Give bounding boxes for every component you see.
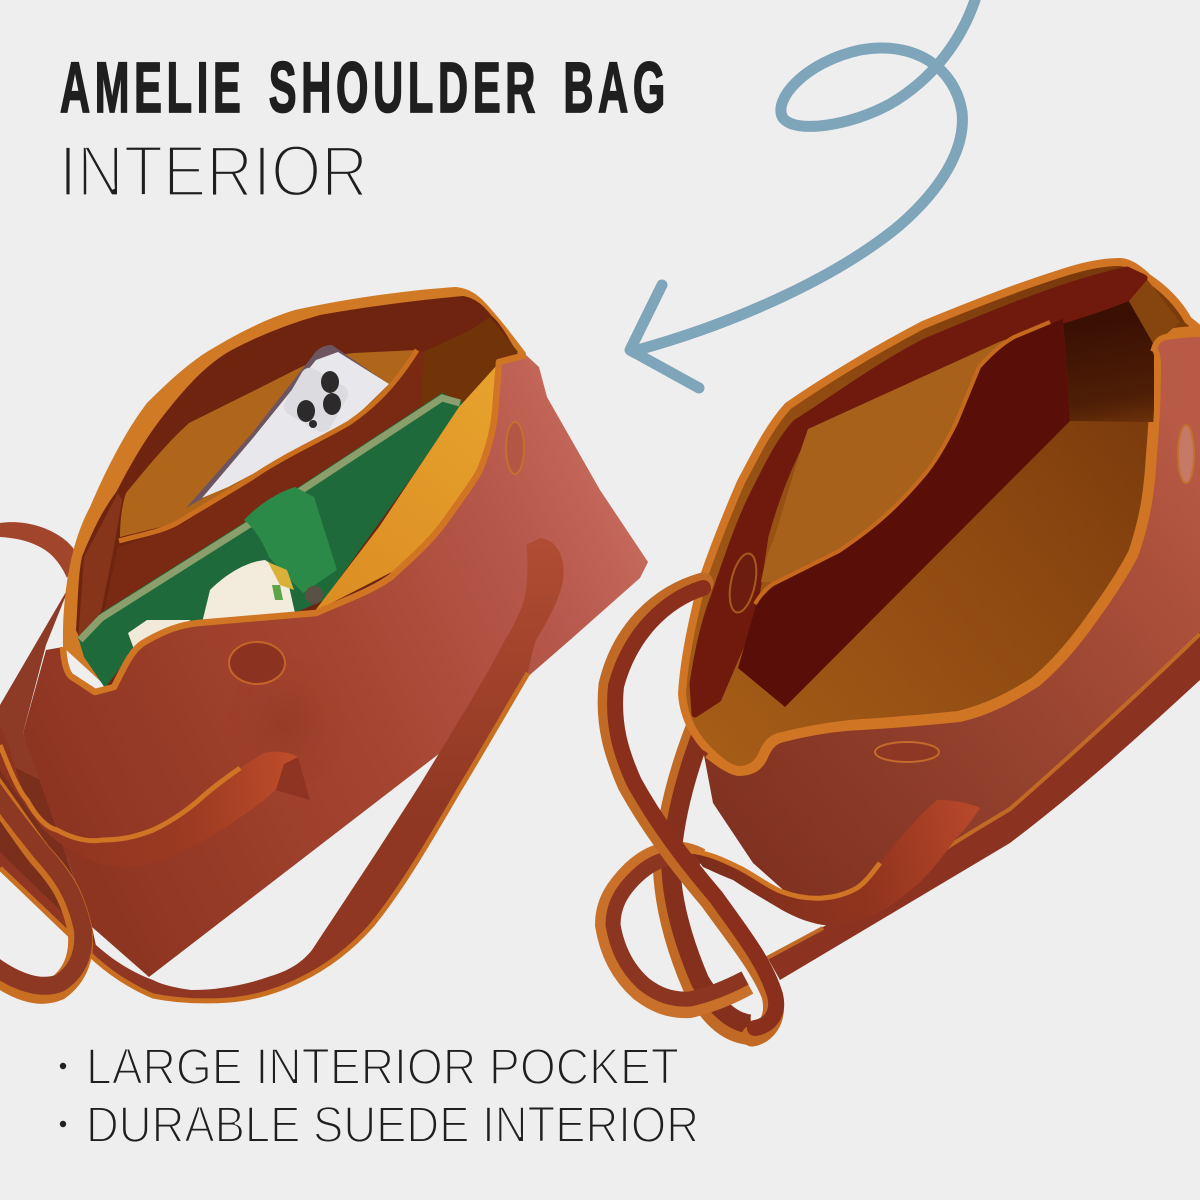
left bag: side loop [0,785,81,991]
bullet 2 [60,1121,66,1127]
arrow [630,0,975,388]
left bag: snap side [506,422,524,474]
left bag: pocket edge [119,350,417,541]
left bag: rear lower panel [0,760,100,965]
right bag: back strap [666,712,750,1032]
bullet text 1: LARGE INTERIOR POCKET [86,1038,679,1095]
icon: scarf [128,560,295,652]
right bag: snap front [875,742,939,762]
left bag: rear strap [0,522,78,578]
left bag: front edge [63,355,526,692]
left bag: handle edge [0,745,240,841]
right bag: back suede [761,319,1063,582]
left bag: side loop leather [0,785,83,986]
subtitle: INTERIOR [59,132,368,212]
icon: phone [186,345,389,508]
left bag: long strap edge [0,673,528,1001]
right bag: inner flap [693,270,1144,714]
bullet list [60,1038,699,1153]
right bag: front edge [707,334,1200,773]
left bag: front handle [0,725,310,867]
left bag: main body [23,355,648,977]
right bag: main strap edge [608,583,774,1036]
left bag: suede lining corner [421,317,518,405]
icon: green wallet [78,393,463,688]
right bag: suede corner [1127,278,1180,345]
bullet 1 [60,1063,66,1069]
right bag: main body [703,334,1200,923]
left bag: side flap [78,493,122,640]
right bag: back strap leather [671,714,750,1024]
right bag: handle edge [690,851,880,898]
right bag: pocket edge [755,322,1050,604]
left bag: dimple shadow [263,690,311,754]
right bag: dark pocket [738,319,1070,707]
left bag: pocket front [100,350,440,630]
left bag: back suede [120,350,417,537]
right bag: handle loop edge [606,852,748,1007]
right bag: snap side [1178,425,1194,483]
left bag: inner dark area [78,298,516,690]
left bag: handle tab [276,757,310,800]
right bag: outer edge and suede floor [682,262,1200,770]
icon: yellow folder [314,365,497,612]
left bag: rear panel strip [0,585,75,865]
left bag: back panel edge [63,287,526,690]
right bag [606,262,1200,1036]
right bag: long strap [767,632,1200,980]
title: AMELIE SHOULDER BAG [60,49,670,128]
left bag: long strap [0,538,564,1002]
left bag [0,287,648,1002]
right bag: long strap edge [767,634,1200,958]
right bag: handle loop leather [613,858,745,999]
right bag: snap inside [725,551,761,615]
right bag: front handle [690,800,980,925]
wallet strap [244,487,337,593]
left bag: snap front [229,642,285,684]
bullet text 2: DURABLE SUEDE INTERIOR [86,1096,699,1153]
right bag: dark upper wall [1063,296,1154,422]
right bag: main strap [615,588,776,1028]
